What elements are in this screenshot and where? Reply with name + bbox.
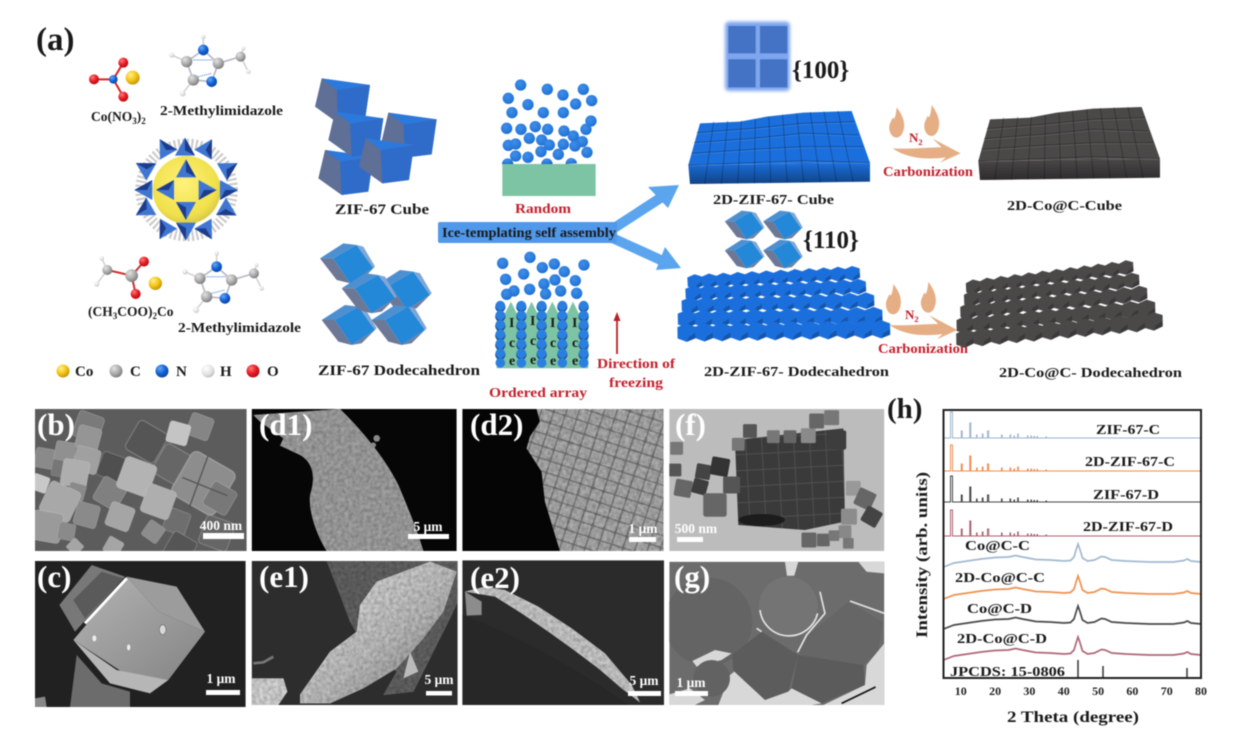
legend: elements: [56, 364, 279, 380]
panel d2: SEM cube sheet close-up: [462, 407, 664, 551]
text: Ice letters: [509, 314, 578, 369]
icon: {110} dodecahedron facet tile: [725, 211, 803, 268]
diagram: 2D ZIF-67 dodecahedron sheet: [677, 266, 890, 342]
legend: elements: C: [130, 364, 141, 380]
chart frame: [944, 410, 1201, 678]
x axis tick labels: 50: [1092, 684, 1104, 698]
text: Ice letters: I: [550, 316, 555, 331]
text: Ice letters: c: [550, 336, 556, 351]
label: Random: Random: [515, 201, 572, 216]
text: Ice letters: e: [509, 354, 515, 369]
molecule: cobalt nitrate: [89, 58, 140, 102]
label: ZIF-67 Dodecahedron: ZIF-67 Dodecahedron: [318, 363, 480, 379]
y axis title: Intensity (arb. units): [914, 472, 931, 638]
series labels: 2D-Co@C-D: [957, 632, 1047, 647]
molecule: cobalt acetate: [94, 256, 162, 299]
label: N2 bottom: 2: [914, 314, 919, 324]
scale bar d1: [408, 519, 449, 539]
text: Ice letters: e: [550, 354, 556, 369]
series: crystalline XRD patterns: [944, 412, 1201, 536]
molecule: 2-methylimidazole bottom: [182, 251, 264, 313]
panel c: SEM dodecahedron: [35, 559, 246, 707]
panel f: TEM cube sheet: [669, 407, 884, 551]
label: cobalt nitrate: ): [137, 109, 141, 124]
panel label e1: (e1): [259, 559, 309, 594]
micrograph b: [34, 408, 248, 552]
series labels: [950, 423, 1175, 680]
label: 2D-ZIF-67- Dodecahedron: 2D-ZIF-67- Dodecahedron: [704, 365, 889, 380]
panel label a: (a): [36, 22, 74, 58]
diagram: 2D Co@C cube sheet: [978, 107, 1160, 180]
x axis tick labels: 20: [989, 684, 1001, 698]
scale bar c: [206, 671, 240, 695]
label: cobalt acetate: Co: [157, 304, 174, 319]
label: Direction of freezing: freezing: [609, 376, 663, 391]
micrograph e2: [462, 560, 665, 706]
scale bar b: 400 nm: [200, 518, 243, 533]
label: cobalt nitrate: 2: [141, 116, 146, 126]
label: cobalt nitrate: 3: [132, 116, 137, 126]
scale bar c: 1 μm: [206, 671, 236, 686]
JPCDS reference ticks: [1078, 660, 1187, 678]
arrow: ice-templating split arrows: [438, 185, 681, 270]
label: Direction of freezing: Direction of: [597, 357, 675, 372]
label: Direction of freezing: [597, 357, 675, 391]
arrow: carbonization top: [889, 105, 961, 163]
panel b: SEM cubes: [29, 407, 247, 567]
label: ZIF-67 Cube: ZIF-67 Cube: [335, 202, 430, 218]
micrograph d2: [462, 408, 664, 552]
icon: ZIF-67 cubes: [315, 78, 437, 195]
text: Ice letters: e: [572, 354, 578, 369]
panel label c: (c): [37, 559, 71, 594]
label: cobalt nitrate: Co(NO: [91, 109, 132, 124]
panel e1: SEM dodecahedron sheet: [252, 559, 458, 705]
panel d1: SEM sheet edge: [252, 407, 457, 551]
label: N2 top: N: [909, 130, 918, 145]
x axis tick labels: 30: [1023, 684, 1035, 698]
series labels: Co@C-C: [965, 539, 1030, 554]
panel g: TEM dodecahedra: [664, 559, 884, 705]
x axis tick labels: [955, 684, 1207, 698]
panel h: XRD chart: [887, 393, 1207, 726]
scale bar e1: 5 μm: [424, 672, 454, 687]
micrograph g: [668, 561, 885, 706]
label: Carbonization top: Carbonization: [883, 165, 973, 180]
series labels: Co@C-D: [967, 602, 1032, 617]
scale bar g: [675, 675, 708, 696]
label: Carbonization bottom: Carbonization: [878, 342, 968, 357]
label: {110}: {110}: [803, 227, 859, 254]
legend: elements: Co: [75, 364, 93, 380]
scale bar g: 1 μm: [676, 675, 706, 690]
label: N2 top: 2: [918, 137, 923, 147]
diagram: 2D ZIF-67 cube sheet: [688, 111, 870, 184]
arrow: direction of freezing: [614, 312, 620, 354]
text: Ice letters: I: [572, 316, 577, 331]
scale bar e2: 5 μm: [629, 673, 659, 688]
series: carbonized XRD patterns: [944, 544, 1201, 660]
label: cobalt acetate: 3: [113, 311, 118, 321]
scale bar e2: [628, 673, 661, 696]
legend: elements: H: [220, 364, 232, 380]
text: Ice letters: I: [530, 314, 535, 329]
panel label d1: (d1): [259, 407, 312, 442]
label: N2 bottom: N: [905, 307, 914, 322]
series labels: 2D-Co@C-C: [955, 571, 1045, 586]
label: 2D-ZIF-67- Cube: 2D-ZIF-67- Cube: [713, 193, 834, 208]
panel label h: (h): [887, 393, 922, 425]
scale bar d2: [628, 521, 658, 542]
arrow: carbonization bottom: [886, 282, 957, 339]
panel a: synthesis schematic: [36, 22, 1182, 401]
diagram: random assembly: [501, 79, 597, 196]
series labels: ZIF-67-C: [1096, 423, 1160, 438]
series labels: JPCDS: 15-0806: [950, 665, 1065, 680]
series labels: 2D-ZIF-67-C: [1085, 455, 1175, 470]
x axis tick labels: 60: [1126, 684, 1138, 698]
panel label g: (g): [674, 559, 710, 594]
scale bar d1: 5 μm: [413, 519, 443, 534]
scale bar e1: [424, 672, 454, 696]
legend: elements: N: [176, 364, 187, 380]
scale bar f: 500 nm: [675, 521, 718, 536]
series labels: ZIF-67-D: [1093, 488, 1159, 503]
panel label f: (f): [675, 407, 706, 442]
micrograph c: [34, 560, 246, 708]
panel e2: SEM sheet side view: [462, 560, 664, 705]
micrograph f: [668, 408, 885, 552]
x axis tick labels: 80: [1195, 684, 1207, 698]
text: Ice letters: c: [530, 334, 536, 349]
x axis tick labels: 40: [1058, 684, 1070, 698]
icon: ZIF-67 framework with yellow sphere: [131, 134, 243, 244]
x axis tick labels: 10: [955, 684, 967, 698]
diagram: 2D Co@C dodecahedron sheet: [956, 257, 1163, 348]
molecule: 2-methylimidazole top: [169, 34, 251, 96]
label: Ice-templating self assembly: Ice-templating self assembly: [442, 225, 616, 240]
micrograph e1: [251, 560, 458, 706]
label: 2-methylimidazole top: 2-Methylimidazole: [160, 103, 283, 118]
icon: {100} cube facet tile: [725, 22, 790, 91]
label: {100}: {100}: [792, 57, 849, 84]
text: Ice letters: c: [509, 336, 515, 351]
panel label d2: (d2): [470, 407, 523, 442]
micrograph d1: [251, 408, 458, 552]
text: Ice letters: c: [572, 336, 578, 351]
text: Ice letters: e: [530, 353, 536, 368]
label: 2D-Co@C-Cube: 2D-Co@C-Cube: [1007, 199, 1122, 214]
scale bar b: [200, 518, 244, 539]
label: cobalt acetate: 2: [152, 311, 158, 321]
x axis title: 2 Theta (degree): [1007, 709, 1139, 726]
text: Ice letters: I: [509, 316, 514, 331]
label: 2-methylimidazole bottom: 2-Methylimidazole: [178, 320, 301, 335]
label: Ordered array: Ordered array: [489, 386, 587, 401]
panel label b: (b): [37, 407, 75, 442]
label: 2D-Co@C- Dodecahedron: 2D-Co@C- Dodecahedron: [999, 366, 1182, 381]
legend: elements: O: [267, 364, 279, 380]
diagram: ordered array with ice columns: [497, 252, 590, 368]
label: cobalt acetate: COO): [117, 304, 152, 319]
icon: ZIF-67 dodecahedra: [320, 243, 432, 345]
scale bar d2: 1 μm: [628, 521, 658, 536]
panel label e2: (e2): [470, 560, 520, 595]
series labels: 2D-ZIF-67-D: [1083, 520, 1173, 535]
x axis tick labels: 70: [1161, 684, 1173, 698]
label: cobalt acetate: (CH: [88, 304, 113, 319]
